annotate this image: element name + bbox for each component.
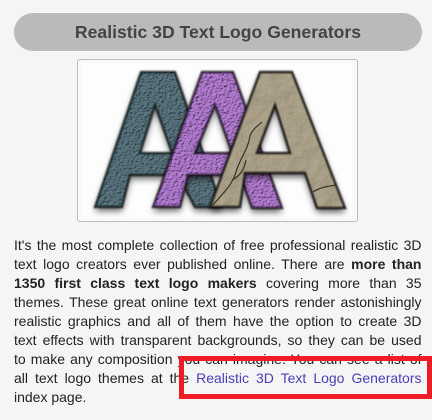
body paragraph: realistic graphics and all of them have the option to create 3D: [14, 313, 422, 329]
white image background: [82, 63, 352, 218]
body paragraph: themes. These great online text generators render astonishingly: [14, 294, 422, 310]
body paragraph: [14, 237, 422, 405]
red highlight box around link: [179, 356, 432, 399]
body paragraph: It's the most complete collection of free professional realistic 3D: [14, 237, 422, 253]
image frame: 3D AAA logo: [77, 59, 358, 222]
title banner: [14, 13, 422, 51]
title banner: Realistic 3D Text Logo Generators: [75, 22, 361, 42]
letter A: purple wool: [153, 72, 282, 212]
body paragraph: all text logo themes at the Realistic 3D Text Logo Generators: [14, 370, 422, 386]
letter A: dark teal knit: [95, 72, 222, 211]
body paragraph: to make any composition you can imagine. You can see a list of: [14, 351, 422, 367]
body paragraph: text logo creators ever published online. There are more than: [14, 256, 421, 272]
body paragraph: text effects with transparent backgrounds, so they can be used: [14, 332, 422, 348]
body paragraph: index page.: [14, 389, 86, 405]
letter A: tan creased paper: [210, 72, 345, 212]
body paragraph: 1350 first class text logo makers covering more than 35: [14, 275, 422, 291]
